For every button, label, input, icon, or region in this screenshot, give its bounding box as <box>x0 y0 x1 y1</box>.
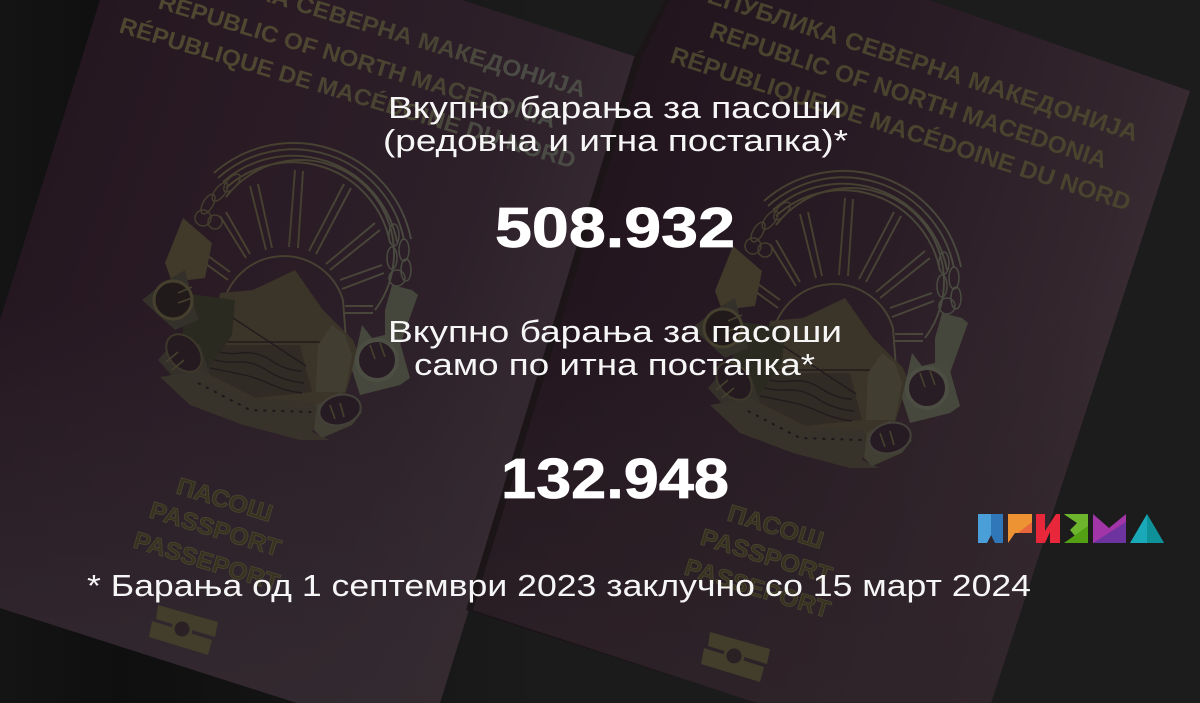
left passport chip symbol <box>149 605 218 655</box>
number: urgent requests: 132.948 <box>501 447 729 511</box>
left passport issuing-state text: RÉPUBLIQUE DE MACÉDOINE DU NORD <box>117 11 579 173</box>
heading: total passport requests: (редовна и итна постапка)* <box>383 123 848 158</box>
heading: urgent passport requests: само по итна постапка* <box>414 347 815 382</box>
right passport document labels: ПАСОШ <box>724 500 827 555</box>
left passport document labels: PASSPORT <box>146 497 285 563</box>
right passport emblem <box>692 171 968 468</box>
right passport issuing-state text: RÉPUBLIQUE DE MACÉDOINE DU NORD <box>667 41 1134 217</box>
left passport emblem <box>142 143 418 440</box>
footnote: * Барања од 1 септември 2023 заклучно со 15 март 2024 <box>87 568 1031 603</box>
right passport document labels <box>681 500 836 624</box>
logo: Prizma <box>978 514 1164 543</box>
heading: urgent passport requests: Вкупно барања за пасоши <box>388 314 842 349</box>
left passport document labels: PASSEPORT <box>130 527 283 597</box>
right passport document labels: PASSPORT <box>697 524 836 590</box>
left passport document labels <box>130 473 285 597</box>
right passport chip symbol <box>701 632 770 682</box>
heading: urgent passport requests <box>388 314 842 382</box>
heading: total passport requests: Вкупно барања за пасоши <box>388 90 842 125</box>
panel: left passport <box>0 0 640 703</box>
left passport document labels: ПАСОШ <box>173 473 276 528</box>
right passport issuing-state text: REPUBLIC OF NORTH MACEDONIA <box>706 17 1110 174</box>
right passport document labels: PASSEPORT <box>681 554 834 624</box>
panel: right passport <box>466 0 1190 703</box>
number: total requests: 508.932 <box>495 196 735 260</box>
heading: total passport requests <box>383 90 848 158</box>
